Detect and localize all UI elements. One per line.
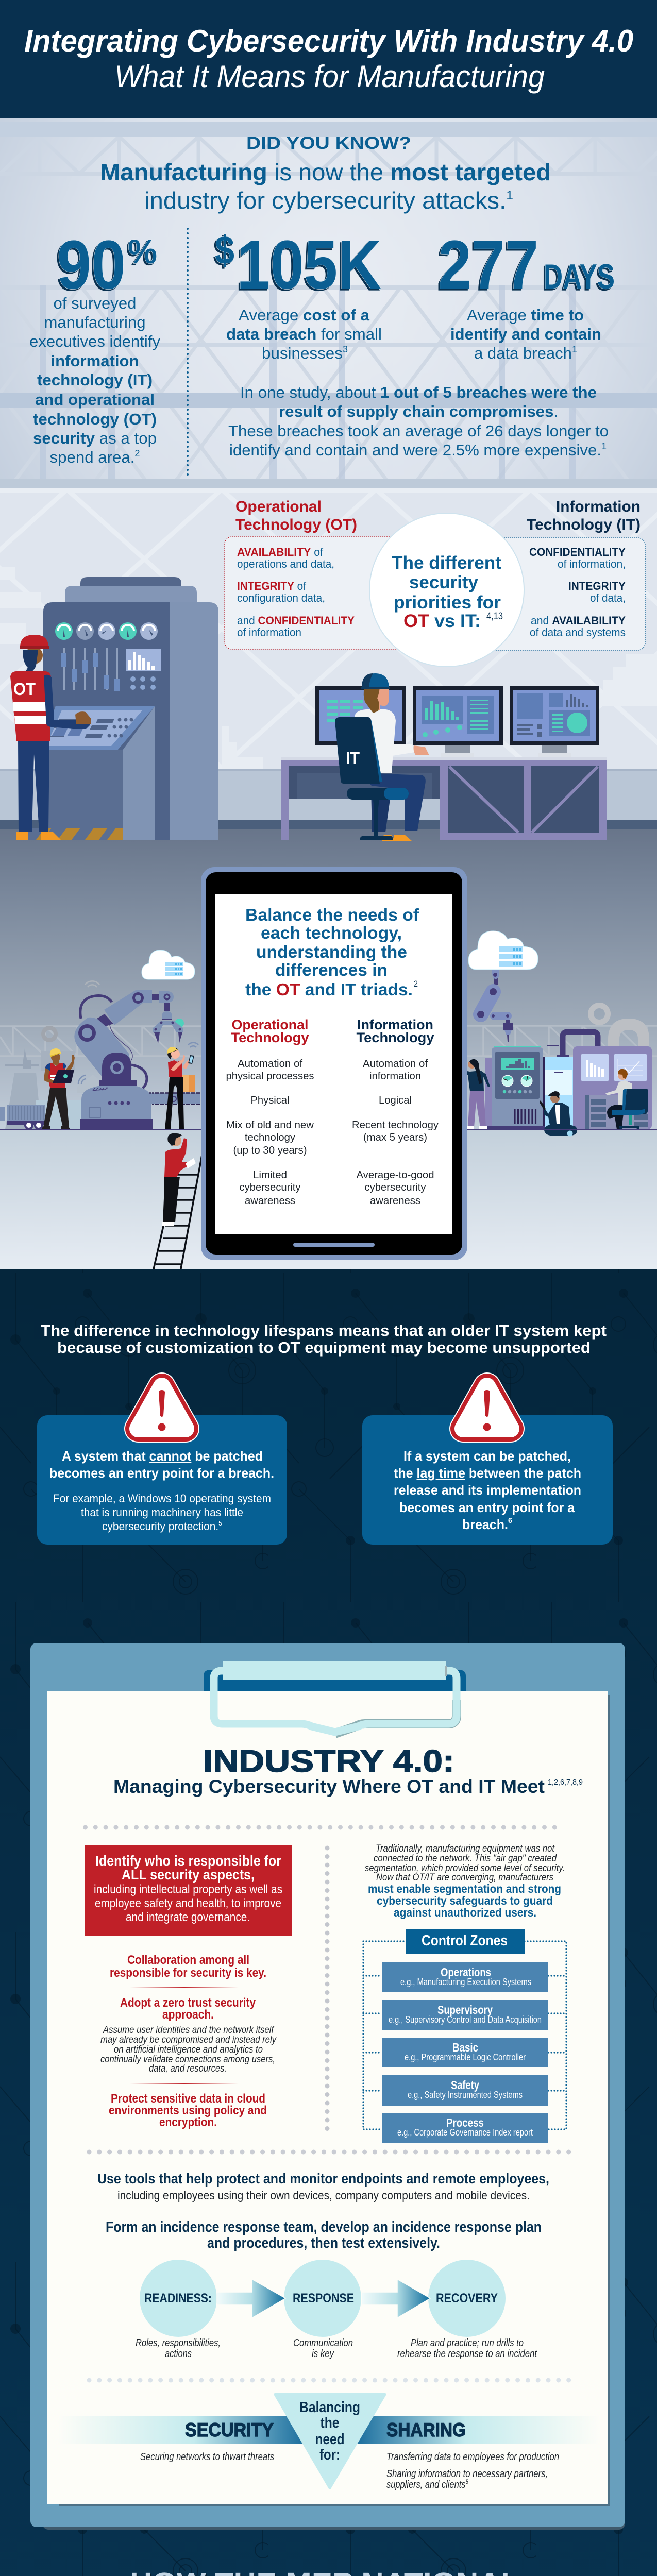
text: use tools: including employees using their own devices, company computers and mobile devices. bbox=[117, 2189, 530, 2202]
text: traditional air gap: segmentation, which provided some level of security. bbox=[365, 1863, 565, 1874]
arrow: readiness to response bbox=[217, 2279, 285, 2318]
column: operational technology bbox=[226, 1017, 314, 1207]
headline: most targeted industry: industry for cybersecurity attacks. bbox=[144, 187, 496, 214]
text: zero trust: Adopt a zero trust security bbox=[120, 1996, 256, 2010]
header band bbox=[0, 0, 657, 118]
gauges bbox=[55, 622, 158, 640]
list: OT triad bbox=[237, 546, 355, 639]
stat: 277 days: 277 bbox=[438, 227, 538, 303]
stat: 90 percent: information bbox=[50, 352, 139, 370]
list: OT triad: operations and data, bbox=[237, 557, 334, 570]
stat: 277 days: Average time to bbox=[467, 306, 584, 324]
panel: identify responsibility: employee safety and health, to improve bbox=[95, 1896, 281, 1910]
stat: 90 percent: % bbox=[128, 232, 157, 270]
panel: system cannot be patched: becomes an entry point for a breach. bbox=[49, 1465, 274, 1481]
captions: actions bbox=[165, 2348, 192, 2360]
heading: balance the needs: each technology, bbox=[261, 923, 402, 942]
text: zero trust: may already be compromised and instead rely bbox=[100, 2035, 277, 2045]
illustration: OT machine cabinet bbox=[27, 577, 218, 840]
text block: supply chain breaches bbox=[228, 383, 609, 459]
balancing label: for: bbox=[319, 2447, 340, 2463]
panel: identify responsibility: and integrate governance. bbox=[126, 1910, 250, 1924]
illustration: purple machine bbox=[573, 1046, 652, 1129]
sharing description: Transferring data to employees for production bbox=[386, 2451, 559, 2463]
clipboard clip bbox=[204, 1661, 466, 1734]
zone: supervisory bbox=[382, 2000, 548, 2030]
panel: identify responsibility: including intellectual property as well as bbox=[94, 1883, 282, 1896]
title line 2: What It Means for Manufacturing bbox=[114, 59, 545, 94]
heading: technology lifespans: because of customization to OT equipment may become unsupported bbox=[57, 1338, 591, 1357]
zone: supervisory: e.g., Supervisory Control and Data Acquisition bbox=[389, 2014, 542, 2025]
sharing description: suppliers, and clients bbox=[386, 2479, 483, 2490]
stat: 90 percent: spend area. bbox=[49, 448, 134, 466]
illustration: worker with laptop bbox=[42, 1048, 75, 1129]
stat: 277 days: DAYS bbox=[544, 257, 615, 296]
diagram: balancing security and sharing bbox=[58, 2393, 599, 2490]
icon: cloud server left bbox=[142, 950, 195, 979]
list: OT triad: and CONFIDENTIALITY bbox=[237, 614, 355, 627]
illustration: woman pointing bbox=[453, 1059, 490, 1129]
heading: balance the needs bbox=[245, 905, 419, 999]
text: protect sensitive data: Protect sensitive data in cloud bbox=[111, 2092, 265, 2106]
heading: balance the needs: Balance the needs of bbox=[245, 905, 419, 924]
security label: SECURITY bbox=[185, 2419, 274, 2441]
panel: lag time between patch: the lag time between the patch bbox=[394, 1465, 581, 1481]
illustration: hanging robot arm bbox=[477, 970, 513, 1042]
control zones header: Control Zones bbox=[422, 1933, 508, 1949]
list: IT triad bbox=[529, 546, 626, 639]
column: operational technology: Physical bbox=[250, 1095, 290, 1106]
callout: different security priorities: OT vs IT: bbox=[403, 611, 481, 631]
column: information technology: Automation of bbox=[363, 1058, 428, 1070]
column: information technology: Logical bbox=[379, 1095, 412, 1106]
column: operational technology: Mix of old and new bbox=[226, 1120, 314, 1131]
zone: process: e.g., Corporate Governance Index report bbox=[397, 2127, 533, 2138]
illustration: conveyor and parcel bbox=[149, 1075, 200, 1105]
panel: system cannot be patched: cybersecurity protection. bbox=[102, 1520, 225, 1533]
heading: did you know: DID YOU KNOW? bbox=[246, 133, 411, 153]
column: information technology: Average-to-good bbox=[357, 1170, 434, 1181]
step: recovery bbox=[428, 2260, 506, 2337]
control console bbox=[40, 706, 155, 840]
panel: lag time between patch: release and its implementation bbox=[394, 1482, 581, 1498]
zone: basic bbox=[382, 2038, 548, 2067]
text: traditional air gap bbox=[365, 1843, 565, 1919]
list: IT triad: and AVAILABILITY bbox=[531, 614, 626, 627]
stat: 90 percent: 90 bbox=[57, 227, 126, 303]
panel: IT priorities bbox=[464, 498, 645, 650]
step: recovery: RECOVERY bbox=[436, 2291, 498, 2306]
text block: supply chain breaches: These breaches took an average of 26 days longer to bbox=[228, 422, 609, 440]
heading: operational technology: Operational bbox=[235, 498, 322, 515]
vertical dotted divider bbox=[187, 229, 189, 478]
heading: balance the needs: differences in bbox=[275, 960, 388, 979]
column: information technology: Information bbox=[357, 1017, 433, 1032]
control zones header bbox=[406, 1929, 525, 1954]
stat: 105K cost: $ bbox=[215, 227, 234, 273]
illustration: man on ladder bbox=[153, 1133, 203, 1272]
illustration: IT worker and chair bbox=[335, 673, 429, 841]
column: information technology: information bbox=[369, 1071, 421, 1082]
headline: most targeted industry: Manufacturing is now the most targeted bbox=[100, 159, 551, 185]
list: IT triad: CONFIDENTIALITY bbox=[529, 546, 626, 558]
text: form response team: and procedures, then test extensively. bbox=[207, 2235, 440, 2251]
zone: process: Process bbox=[446, 2116, 484, 2129]
callout: different security priorities: priorities for bbox=[394, 592, 501, 613]
illustration: robot arm bbox=[74, 990, 184, 1129]
text: zero trust bbox=[100, 1996, 277, 2074]
text: collaboration bbox=[110, 1953, 266, 1980]
text: traditional air gap: must enable segmentation and strong bbox=[368, 1882, 561, 1895]
stat: 90 percent: and operational bbox=[35, 391, 155, 409]
heading: information technology: Information bbox=[556, 498, 641, 515]
illustration: seated worker at machine bbox=[605, 1069, 648, 1129]
subheading: managing cybersecurity: 1,2,6,7,8,9 bbox=[548, 1778, 583, 1787]
text: traditional air gap: cybersecurity safeguards to guard bbox=[377, 1894, 553, 1907]
text: form response team bbox=[106, 2219, 542, 2251]
zone: safety: e.g., Safety Instrumented Systems bbox=[408, 2090, 523, 2100]
list: OT triad: AVAILABILITY of bbox=[237, 546, 324, 558]
panel: identify responsibility bbox=[85, 1845, 292, 1936]
illustration: gears and pipe backdrop bbox=[547, 1003, 649, 1057]
column: information technology bbox=[352, 1017, 439, 1207]
sharing description bbox=[386, 2451, 559, 2490]
icon: wifi signals bbox=[78, 981, 198, 1084]
step: readiness: READINESS: bbox=[144, 2291, 212, 2306]
captions: Communication bbox=[293, 2337, 353, 2349]
sharing description: 5 bbox=[466, 2478, 468, 2485]
text block: supply chain breaches: In one study, about 1 out of 5 breaches were the bbox=[240, 383, 597, 401]
column: operational technology: Limited bbox=[253, 1170, 287, 1181]
illustration: control panel machine bbox=[480, 1046, 545, 1129]
stat: 277 days: 1 bbox=[572, 344, 577, 354]
title line 1: Integrating Cybersecurity With Industry 4.0 bbox=[24, 24, 633, 58]
stat: 90 percent: 2 bbox=[134, 448, 140, 459]
zone: basic: e.g., Programmable Logic Controller bbox=[405, 2052, 526, 2062]
column: operational technology: Technology bbox=[231, 1030, 309, 1045]
panel: lag time between patch: breach. bbox=[462, 1517, 510, 1532]
icon: cloud server right bbox=[468, 931, 538, 970]
panel: did you know background with truss bbox=[0, 118, 657, 488]
captions: is key bbox=[312, 2348, 334, 2360]
text: collaboration: Collaboration among all bbox=[127, 1953, 249, 1967]
illustration: IT workstation desk bbox=[281, 757, 607, 840]
stat: 105K cost bbox=[215, 227, 382, 362]
headline: most targeted industry bbox=[100, 159, 551, 214]
heading: technology lifespans: The difference in technology lifespans means that an older IT system kept bbox=[41, 1321, 607, 1340]
zone: operations: e.g., Manufacturing Execution Systems bbox=[400, 1977, 531, 1987]
heading: balance the needs: understanding the bbox=[256, 942, 407, 961]
text: protect sensitive data: encryption. bbox=[159, 2115, 217, 2129]
background truss behind factory scenes bbox=[0, 1026, 657, 1056]
stat: 105K cost: businesses bbox=[262, 344, 342, 362]
security description: Securing networks to thwart threats bbox=[140, 2451, 274, 2463]
illustration: three monitors bbox=[315, 686, 599, 757]
icon: warning triangle bbox=[463, 1386, 511, 1431]
text block: supply chain breaches: identify and contain and were 2.5% more expensive. bbox=[229, 441, 600, 459]
machine display bbox=[126, 649, 161, 671]
zone: safety bbox=[382, 2075, 548, 2106]
column: operational technology: (up to 30 years) bbox=[233, 1145, 307, 1156]
zone: safety: Safety bbox=[451, 2078, 479, 2092]
stat: 277 days bbox=[438, 227, 615, 362]
column: information technology: Recent technology bbox=[352, 1120, 439, 1131]
text block: supply chain breaches: 1 bbox=[601, 441, 607, 451]
column: information technology: Technology bbox=[357, 1030, 434, 1045]
ground lines bbox=[0, 1129, 657, 1130]
text: traditional air gap: Now that OT/IT are converging, manufacturers bbox=[376, 1872, 553, 1883]
stat: 277 days: identify and contain bbox=[450, 325, 601, 343]
panel: system cannot be patched bbox=[37, 1386, 287, 1545]
illustration: seated man with phone bbox=[540, 1091, 577, 1137]
headline: most targeted industry: 1 bbox=[506, 189, 513, 202]
step: response: RESPONSE bbox=[293, 2291, 354, 2306]
zone: supervisory: Supervisory bbox=[437, 2003, 493, 2016]
stat: 90 percent: manufacturing bbox=[44, 313, 145, 331]
illustration: OT worker bbox=[10, 635, 91, 840]
zone: operations: Operations bbox=[441, 1965, 491, 1979]
text: form response team: Form an incidence response team, develop an incidence response plan bbox=[106, 2219, 542, 2235]
stat: 105K cost: 105K bbox=[237, 227, 381, 303]
list: IT triad: of data, bbox=[590, 591, 626, 604]
subheading: managing cybersecurity: Managing Cybersecurity Where OT and IT Meet bbox=[113, 1776, 545, 1797]
callout: different security priorities: The different bbox=[392, 553, 501, 573]
text: use tools: Use tools that help protect and monitor endpoints and remote employees, bbox=[97, 2171, 549, 2187]
panel: identify responsibility: ALL security aspects, bbox=[122, 1867, 255, 1883]
text: traditional air gap: Traditionally, manufacturing equipment was not bbox=[376, 1843, 555, 1854]
text: zero trust: approach. bbox=[162, 2008, 214, 2022]
IT chair label: IT bbox=[346, 749, 360, 768]
captions: Roles, responsibilities, bbox=[136, 2337, 221, 2349]
list: IT triad: INTEGRITY bbox=[568, 580, 626, 592]
text: zero trust: on artificial intelligence and analytics to bbox=[114, 2044, 263, 2055]
zone: process bbox=[382, 2113, 548, 2143]
stat: 105K cost: Average cost of a bbox=[239, 306, 370, 324]
text: protect sensitive data bbox=[109, 2092, 267, 2129]
zone: basic: Basic bbox=[452, 2041, 478, 2054]
diagram: control zones bbox=[363, 1929, 566, 2143]
heading: industry 4.0: INDUSTRY 4.0: bbox=[203, 1744, 454, 1778]
column: operational technology: awareness bbox=[245, 1195, 295, 1207]
panel: system cannot be patched: A system that cannot be patched bbox=[62, 1448, 263, 1464]
stat: 90 percent: technology (OT) bbox=[33, 410, 157, 428]
panel: clipboard bbox=[30, 1643, 625, 2530]
column: operational technology: Automation of bbox=[238, 1058, 302, 1070]
callout: different security priorities: security bbox=[409, 572, 479, 592]
heading: balance the needs: the OT and IT triads. bbox=[245, 980, 413, 999]
captions: rehearse the response to an incident bbox=[397, 2348, 537, 2360]
text: use tools bbox=[97, 2171, 549, 2202]
list: IT triad: of data and systems bbox=[530, 626, 626, 639]
callout: different security priorities: 4,13 bbox=[486, 611, 503, 622]
sliders bbox=[61, 648, 120, 691]
column: operational technology: physical processes bbox=[226, 1071, 314, 1082]
panel: OT priorities bbox=[225, 498, 431, 649]
column: operational technology: Operational bbox=[232, 1017, 308, 1032]
panel: system cannot be patched: For example, a Windows 10 operating system bbox=[53, 1492, 271, 1505]
illustration: left factory backdrop bbox=[5, 981, 198, 1129]
panel: lag time between patch: becomes an entry point for a bbox=[399, 1500, 575, 1515]
panel: tablet bbox=[201, 867, 467, 1260]
stat: 277 days: a data breach bbox=[474, 344, 572, 362]
stat: 90 percent: executives identify bbox=[29, 332, 160, 350]
stat: 105K cost: 3 bbox=[343, 344, 348, 354]
sharing label: SHARING bbox=[386, 2419, 466, 2441]
captions bbox=[136, 2337, 537, 2360]
balancing label: the bbox=[321, 2415, 339, 2431]
OT vest label: OT bbox=[13, 680, 36, 699]
panel: tablet: 2 bbox=[414, 979, 418, 989]
column: information technology: (max 5 years) bbox=[363, 1132, 427, 1143]
heading: operational technology: Technology (OT) bbox=[235, 516, 357, 533]
balancing label: need bbox=[315, 2431, 344, 2448]
stat: 90 percent bbox=[29, 227, 160, 466]
panel: lag time between patch bbox=[362, 1386, 613, 1545]
column: information technology: awareness bbox=[370, 1195, 420, 1207]
step: response bbox=[284, 2260, 361, 2337]
list: IT triad: of information, bbox=[558, 557, 626, 570]
icon: warning triangle bbox=[138, 1386, 186, 1431]
arrow: response to recovery bbox=[362, 2279, 430, 2318]
heading: information technology bbox=[527, 498, 641, 533]
zone: operations bbox=[382, 1962, 548, 1992]
heading: technology lifespans bbox=[41, 1321, 607, 1357]
stat: 105K cost: data breach for small bbox=[226, 325, 382, 343]
heading: operational technology bbox=[235, 498, 357, 533]
text: traditional air gap: against unauthorized users. bbox=[394, 1906, 536, 1919]
stat: 90 percent: security as a top bbox=[33, 429, 157, 447]
text: zero trust: continually validate connections among users, bbox=[100, 2054, 275, 2065]
panel: identify responsibility: Identify who is responsible for bbox=[95, 1853, 281, 1869]
balancing label bbox=[299, 2399, 360, 2463]
list: OT triad: INTEGRITY of bbox=[237, 580, 307, 592]
panel: lag time between patch: If a system can be patched, bbox=[403, 1448, 571, 1464]
text: zero trust: data, and resources. bbox=[149, 2063, 227, 2074]
text block: supply chain breaches: result of supply chain compromises. bbox=[279, 402, 558, 420]
panel: lag time between patch: 6 bbox=[508, 1516, 512, 1525]
sharing description: Sharing information to necessary partners, bbox=[386, 2468, 548, 2480]
illustration: delivery truck bbox=[0, 1105, 45, 1129]
text: collaboration: responsible for security is key. bbox=[110, 1966, 266, 1980]
dark circuit background bbox=[0, 1269, 657, 2576]
text: zero trust: Assume user identities and the network itself bbox=[103, 2025, 275, 2036]
illustration: worker with phone bbox=[165, 1047, 194, 1129]
column: operational technology: cybersecurity bbox=[239, 1182, 301, 1193]
list: OT triad: of information bbox=[237, 626, 301, 639]
step: readiness bbox=[140, 2260, 217, 2337]
column: information technology: cybersecurity bbox=[365, 1182, 426, 1193]
callout: different security priorities bbox=[369, 513, 524, 667]
stat: 90 percent: technology (IT) bbox=[37, 371, 153, 389]
hazard stripes bbox=[27, 828, 123, 840]
panel: system cannot be patched: 5 bbox=[218, 1519, 222, 1527]
panel: control room wall and floor bbox=[0, 488, 657, 1269]
heading: information technology: Technology (IT) bbox=[527, 516, 641, 533]
list: OT triad: configuration data, bbox=[237, 591, 325, 604]
column: operational technology: technology bbox=[245, 1132, 295, 1143]
text: protect sensitive data: environments using policy and bbox=[109, 2104, 267, 2117]
panel: system cannot be patched: that is running machinery has little bbox=[81, 1506, 243, 1519]
text: traditional air gap: connected to the network. This "air gap" created bbox=[374, 1853, 557, 1864]
stat: 90 percent: of surveyed bbox=[54, 294, 136, 312]
captions: Plan and practice; run drills to bbox=[411, 2337, 524, 2349]
illustration: blue machine bbox=[545, 1057, 573, 1129]
diagram: incident response flow bbox=[136, 2260, 537, 2360]
balancing label: Balancing bbox=[299, 2399, 360, 2416]
